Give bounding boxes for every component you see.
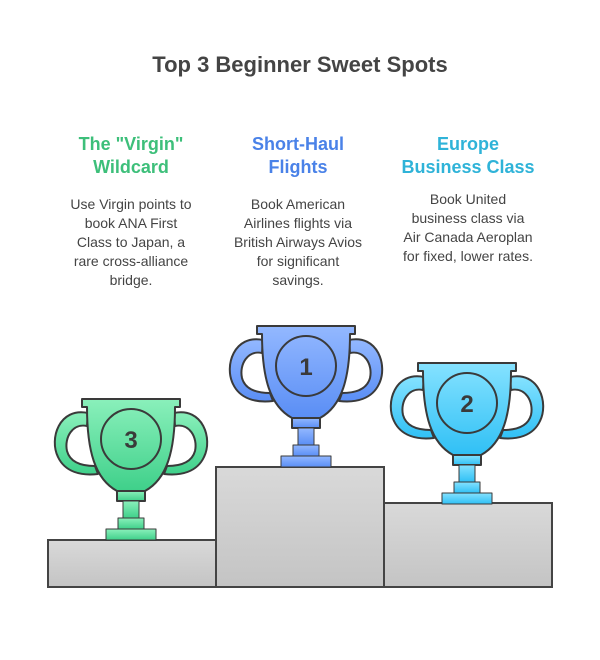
podium: right block xyxy=(384,503,552,587)
heading: europe business xyxy=(401,134,535,177)
podium: center block xyxy=(216,467,384,587)
heading: europe business: Europe xyxy=(437,134,499,154)
text: short-haul: Book American xyxy=(251,196,345,212)
trophy 1 xyxy=(230,326,382,467)
text: europe: business class via xyxy=(412,210,524,226)
text: virgin: rare cross-alliance xyxy=(74,253,188,269)
text: short-haul: savings. xyxy=(272,272,324,288)
trophy 2 xyxy=(391,363,543,504)
text: virgin: book ANA First xyxy=(85,215,177,231)
heading: virgin wildcard: The "Virgin" xyxy=(79,134,183,154)
podium: left block xyxy=(48,540,216,587)
heading: short-haul xyxy=(252,134,344,177)
text: short-haul: for significant xyxy=(257,253,339,269)
text: short-haul: Airlines flights via xyxy=(244,215,352,231)
text: virgin: Class to Japan, a xyxy=(77,234,185,250)
trophy 3: 3 xyxy=(124,427,138,454)
trophy 1: 1 xyxy=(299,354,313,381)
trophy 3 xyxy=(55,399,207,540)
title: Top 3 Beginner Sweet Spots xyxy=(152,52,448,77)
text: virgin: bridge. xyxy=(110,272,152,288)
heading: virgin wildcard xyxy=(78,134,183,177)
heading: short-haul: Flights xyxy=(268,157,328,177)
text: europe: for fixed, lower rates. xyxy=(403,248,533,264)
text: virgin: Use Virgin points to xyxy=(70,196,192,212)
heading: short-haul: Short-Haul xyxy=(252,134,344,154)
heading: virgin wildcard: Wildcard xyxy=(93,157,169,177)
text: short-haul xyxy=(234,196,362,288)
trophy 2: 2 xyxy=(460,391,474,418)
heading: europe business: Business Class xyxy=(401,157,535,177)
text: europe: Book United xyxy=(430,191,506,207)
text: europe xyxy=(403,191,533,264)
text: short-haul: British Airways Avios xyxy=(234,234,362,250)
text: virgin xyxy=(70,196,192,288)
text: europe: Air Canada Aeroplan xyxy=(403,229,533,245)
